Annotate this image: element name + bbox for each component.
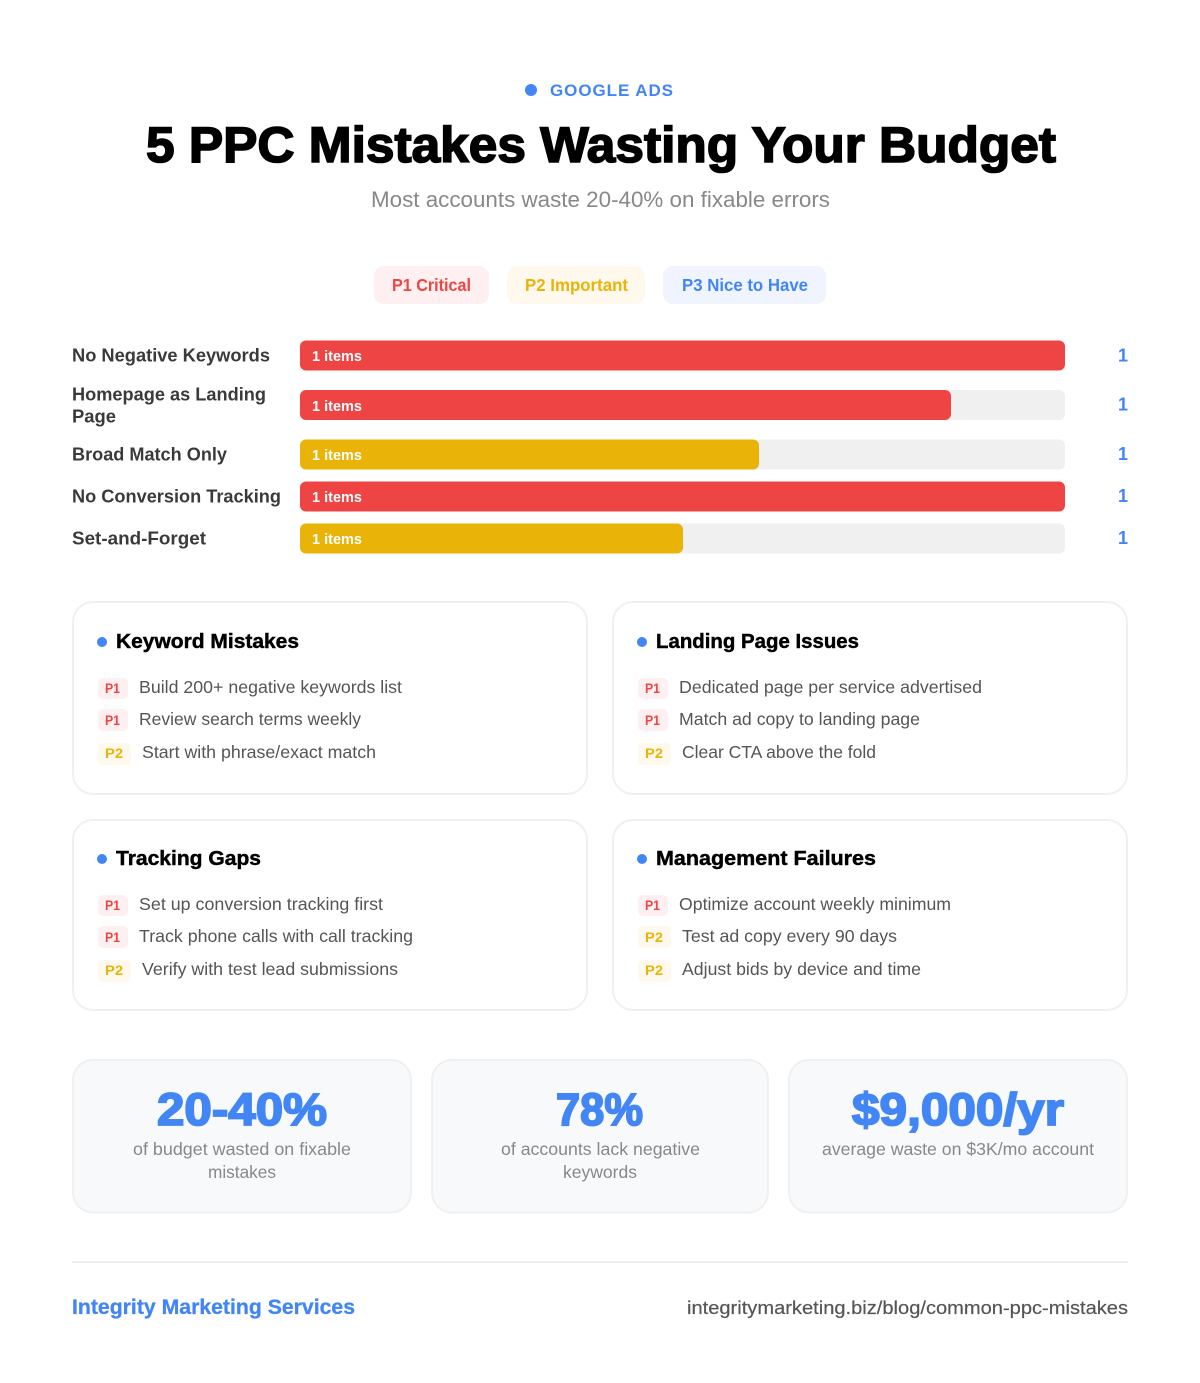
- eyebrow: Google Ads: GOOGLE ADS: [550, 81, 673, 100]
- panel: Management Failures: P2: [645, 930, 663, 945]
- panel: Landing Page Issues: Match ad copy to landing page: [679, 709, 920, 729]
- subtitle: Most accounts waste 20-40% on fixable errors: [371, 187, 830, 212]
- stat: 78%: of accounts lack negative: [501, 1139, 700, 1159]
- bar: No Conversion Tracking: 1: [1118, 486, 1128, 506]
- panel: Landing Page Issues: [613, 602, 1127, 794]
- legend chip: P3 Nice to Have: [663, 266, 826, 304]
- bar: No Negative Keywords: 1: [1118, 346, 1128, 366]
- panel: Keyword Mistakes: P2: [105, 746, 123, 761]
- stat: 20-40%: of budget wasted on fixable: [133, 1139, 351, 1159]
- stat: $9,000/yr: average waste on $3K/mo account: [822, 1139, 1094, 1159]
- bar: No Conversion Tracking: 1 items: [312, 489, 362, 506]
- legend chip: P3 Nice to Have: P3 Nice to Have: [682, 275, 808, 295]
- stat: 78%: [432, 1060, 768, 1212]
- bar: No Negative Keywords: 1 items: [312, 348, 362, 365]
- panel: Keyword Mistakes: Build 200+ negative keywords list: [139, 677, 402, 697]
- legend: [374, 266, 826, 304]
- stat: 20-40%: 20-40%: [157, 1084, 327, 1135]
- bar: Broad Match Only: [72, 440, 1128, 470]
- panel: Tracking Gaps: P2: [105, 963, 123, 978]
- panel: Management Failures: Optimize account weekly minimum: [679, 894, 951, 914]
- panel: Tracking Gaps: P1: [105, 930, 120, 945]
- panel: Landing Page Issues: Dedicated page per service advertised: [679, 677, 982, 697]
- panel: Management Failures: Test ad copy every 90 days: [682, 926, 897, 946]
- bar chart: [72, 340, 1128, 554]
- panel: Keyword Mistakes: [73, 602, 587, 794]
- panel: Landing Page Issues: Landing Page Issues: [656, 630, 859, 653]
- panel: Management Failures: Management Failures: [656, 847, 876, 870]
- panel: Tracking Gaps: P1: [105, 898, 120, 913]
- legend chip: P2 Important: P2 Important: [525, 275, 628, 295]
- bar: No Conversion Tracking: No Conversion Tracking: [72, 486, 281, 506]
- panel: Landing Page Issues: Clear CTA above the fold: [682, 742, 876, 762]
- panel: Keyword Mistakes: Review search terms weekly: [139, 709, 361, 729]
- bar: No Negative Keywords: [72, 340, 1128, 370]
- legend chip: P1 Critical: P1 Critical: [392, 275, 471, 295]
- panel: Tracking Gaps: Verify with test lead submissions: [142, 959, 398, 979]
- panel: Keyword Mistakes: Keyword Mistakes: [116, 630, 299, 653]
- bar: Homepage as Landing Page: 1 items: [312, 398, 362, 415]
- panel: Tracking Gaps: [73, 820, 587, 1010]
- legend chip: P1 Critical: [374, 266, 489, 304]
- footer: brand: Integrity Marketing Services: [72, 1296, 355, 1319]
- panel: Tracking Gaps: Tracking Gaps: [116, 847, 261, 870]
- panel: Keyword Mistakes: Start with phrase/exact match: [142, 742, 376, 762]
- stat: $9,000/yr: $9,000/yr: [852, 1084, 1064, 1135]
- bar: Homepage as Landing Page: [72, 384, 1128, 426]
- bar: Set-and-Forget: Set-and-Forget: [72, 528, 206, 548]
- bar: No Conversion Tracking: [72, 482, 1128, 512]
- title: 5 PPC Mistakes Wasting Your Budget: [146, 117, 1056, 173]
- panel: Management Failures: Adjust bids by device and time: [682, 959, 921, 979]
- stat: 78%: keywords: [563, 1162, 637, 1182]
- bar: No Negative Keywords: No Negative Keywords: [72, 344, 270, 366]
- bar: Broad Match Only: 1: [1118, 444, 1128, 464]
- panel: Keyword Mistakes: P1: [105, 713, 120, 728]
- panel: Keyword Mistakes: P1: [105, 681, 120, 696]
- panel: Tracking Gaps: Track phone calls with call tracking: [139, 926, 413, 946]
- bar: Homepage as Landing Page: Page: [72, 406, 116, 426]
- panel: Landing Page Issues: P1: [645, 681, 660, 696]
- bar: Broad Match Only: 1 items: [312, 447, 362, 464]
- bar: Homepage as Landing Page: 1: [1118, 394, 1128, 414]
- bar: Set-and-Forget: 1: [1118, 528, 1128, 548]
- bar: Broad Match Only: Broad Match Only: [72, 444, 228, 464]
- panel: Tracking Gaps: Set up conversion tracking first: [139, 894, 383, 914]
- panel: Management Failures: P1: [645, 898, 660, 913]
- panel: Landing Page Issues: P2: [645, 746, 663, 761]
- panel: Management Failures: P2: [645, 963, 663, 978]
- bar: Homepage as Landing Page: Homepage as Landing: [72, 384, 266, 404]
- footer: URL: integritymarketing.biz/blog/common-ppc-mistakes: [687, 1297, 1128, 1318]
- bar: Set-and-Forget: [72, 524, 1128, 554]
- stat: 20-40%: [73, 1060, 411, 1212]
- stat: 20-40%: mistakes: [208, 1162, 276, 1182]
- legend chip: P2 Important: [507, 266, 645, 304]
- stat: 78%: 78%: [556, 1084, 643, 1135]
- bar: Set-and-Forget: 1 items: [312, 531, 362, 548]
- panel: Management Failures: [613, 820, 1127, 1010]
- panel: Landing Page Issues: P1: [645, 713, 660, 728]
- stat: $9,000/yr: [789, 1060, 1127, 1212]
